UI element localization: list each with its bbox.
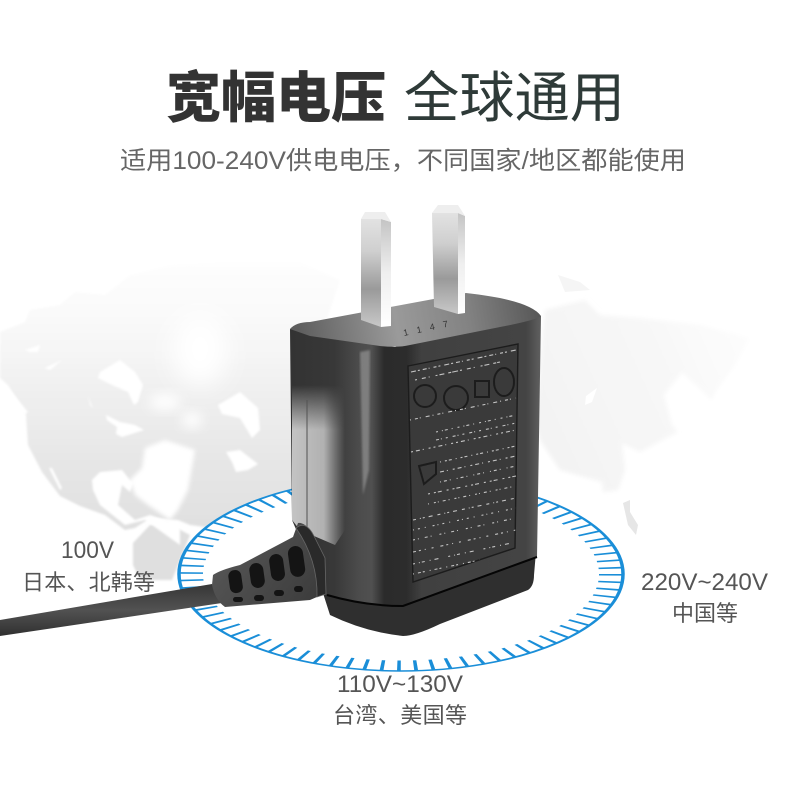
power adapter [0,205,541,636]
label: 100V: 日本、北韩等 [22,570,155,595]
moulded rating label [408,344,518,582]
map: South America [133,522,190,580]
label embossed lines [410,350,516,574]
map: light land gaps [0,345,260,545]
adapter top face [290,293,541,347]
cable strain relief [212,523,326,607]
label: 100V: 100V [61,537,114,564]
adapter pin: right [432,205,465,314]
label: 110V~130V: 110V~130V [337,671,463,698]
map: Asia details [558,275,638,535]
label: 220V~240V: 中国等 [672,601,738,626]
label: 220V~240V [641,569,768,626]
strain relief slots [228,545,306,602]
power cable [0,584,222,636]
adapter base [322,540,537,636]
title [166,53,625,133]
body highlight [360,350,370,495]
adapter body [290,316,541,606]
adapter left side highlight [292,380,345,545]
map: North America [0,262,340,580]
label: 220V~240V: 220V~240V [641,569,768,596]
label symbols [414,368,514,484]
world map background [0,262,750,580]
title: bold part: 宽幅电压 [166,53,386,133]
map: Asia [535,300,750,492]
top face embossed marks: 1 1 4 7 [402,318,452,338]
subtitle: 适用100-240V供电电压，不同国家/地区都能使用 [120,147,686,175]
flange [296,525,326,597]
blue voltage ring [179,477,623,671]
title: regular part: 全球通用 [404,53,625,133]
groove line [327,557,537,606]
adapter pin: left [361,212,391,327]
label: 110V~130V: 台湾、美国等 [333,703,467,728]
label: 110V~130V [333,671,467,728]
map: white glow patches [130,314,228,520]
label: 100V [22,537,155,595]
